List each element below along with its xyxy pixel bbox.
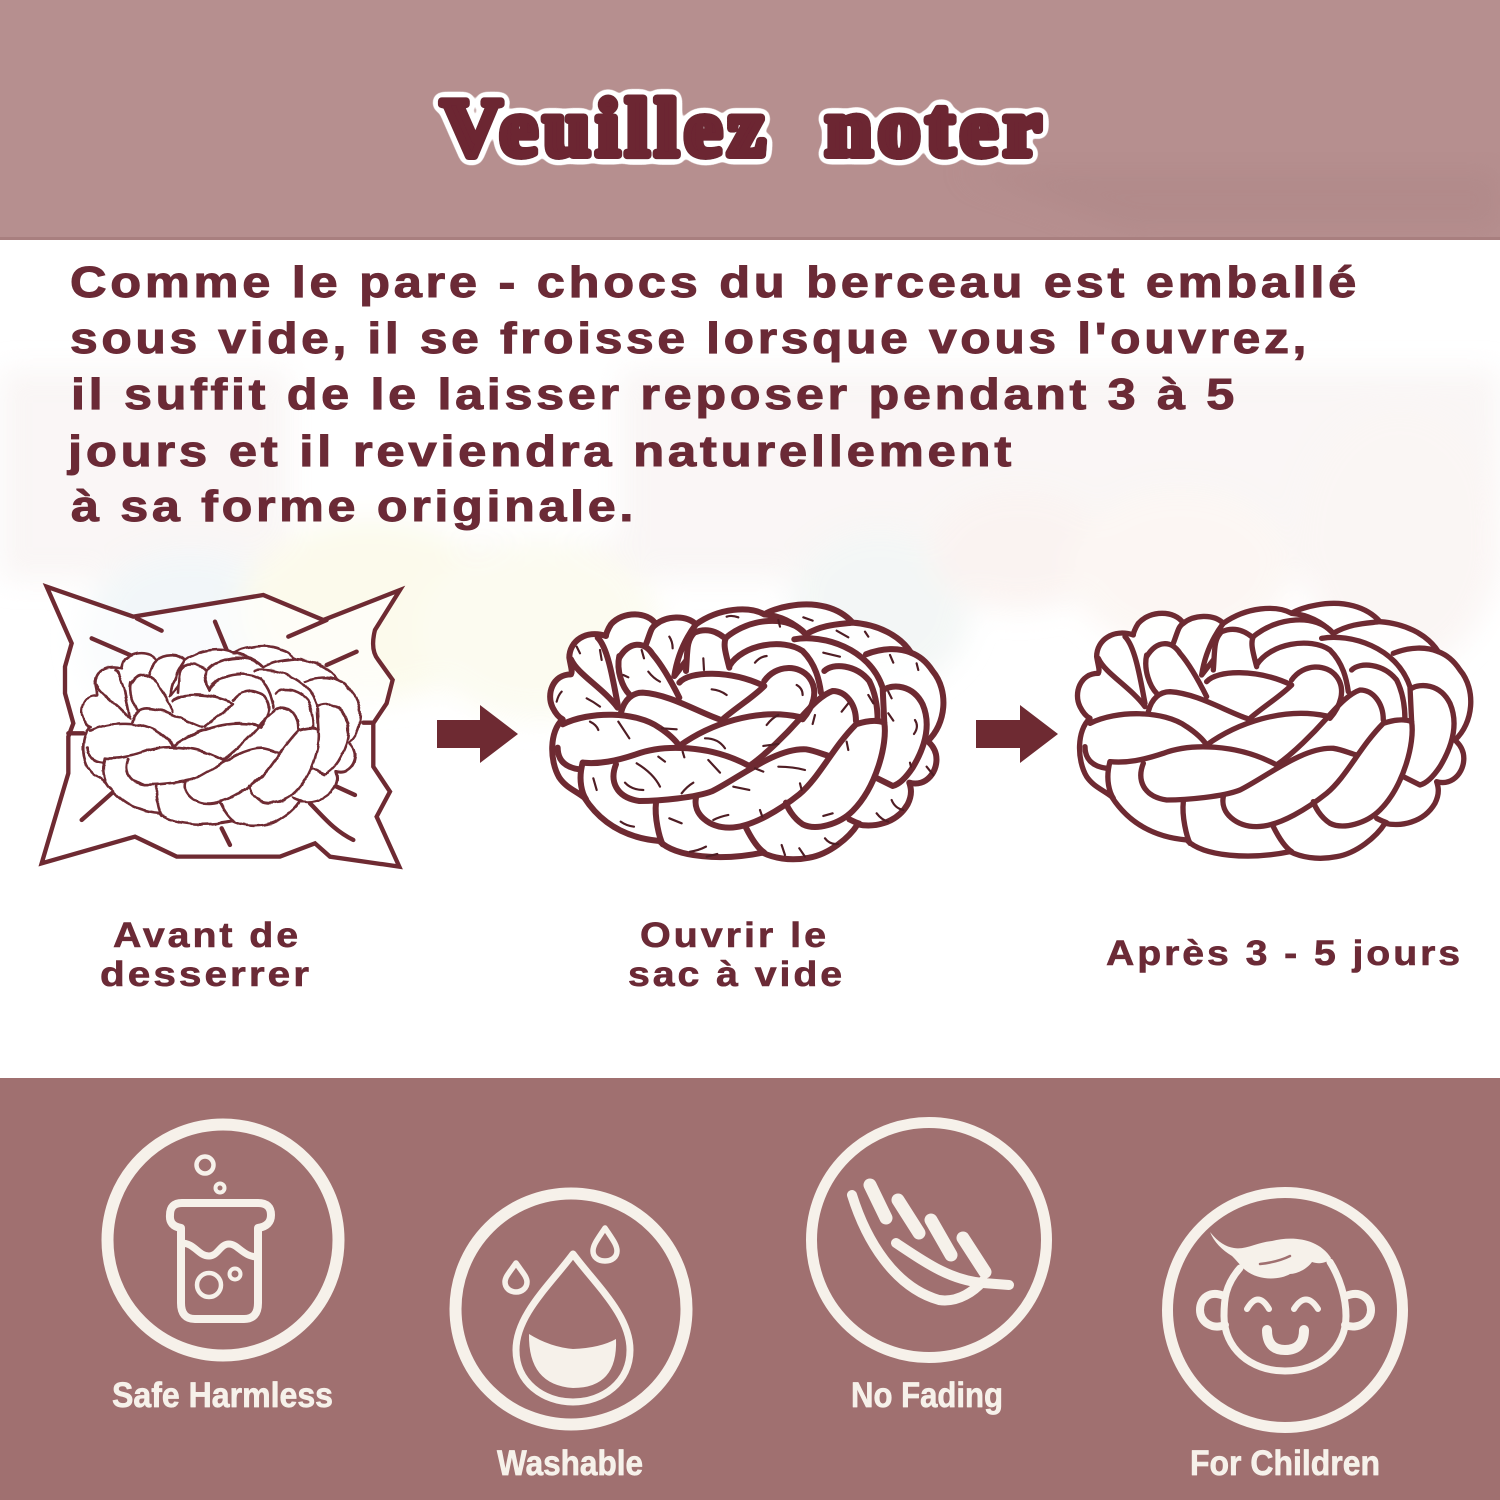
text block: explanation: Comme le pare - chocs du berceau est emballé — [70, 258, 1360, 307]
icon: water drops — [505, 1228, 630, 1402]
label: open the vacuum bag: Ouvrir le — [640, 916, 829, 955]
text block: explanation: sous vide, il se froisse lorsque vous l'ouvrez, — [70, 314, 1310, 363]
illustration: vacuum bag with compressed braid — [42, 587, 400, 867]
illustration: restored braid — [1077, 603, 1471, 858]
label: For Children — [1190, 1444, 1380, 1483]
icon: baby face — [1200, 1232, 1371, 1371]
text block: explanation — [67, 258, 1360, 531]
bag outline — [42, 587, 400, 867]
icon: feather — [852, 1185, 1009, 1300]
label: open the vacuum bag — [628, 916, 845, 994]
label: before loosening — [100, 916, 312, 994]
label: No Fading — [851, 1376, 1003, 1415]
label: Safe Harmless — [112, 1376, 333, 1415]
label: Washable — [497, 1444, 643, 1483]
text block: explanation: il suffit de le laisser reposer pendant 3 à 5 — [71, 370, 1238, 419]
label: open the vacuum bag: sac à vide — [628, 955, 845, 994]
text block: explanation: jours et il reviendra naturellement — [67, 427, 1015, 476]
arrow: first step — [437, 705, 518, 763]
text block: explanation: à sa forme originale. — [71, 482, 637, 531]
icon: drop ring — [456, 1194, 686, 1424]
panel: features band — [0, 1078, 1500, 1500]
title: Veuillez noter — [441, 82, 1047, 173]
icon: beaker — [170, 1156, 271, 1319]
label: before loosening: Avant de — [113, 916, 301, 955]
feature: safe harmless — [108, 1124, 338, 1415]
wrinkled braid — [82, 646, 360, 826]
label: before loosening: desserrer — [100, 955, 312, 994]
label: after 3 to 5 days: Après 3 - 5 jours — [1106, 934, 1463, 973]
feature: for children — [1168, 1192, 1402, 1483]
panel: header band — [0, 0, 1500, 240]
icon: baby ring — [1168, 1192, 1402, 1428]
illustration: opened braid with creases — [550, 604, 943, 859]
feature: washable — [456, 1194, 686, 1483]
icon: beaker ring — [108, 1124, 338, 1356]
feature: no fading — [812, 1122, 1046, 1415]
arrow: second step — [976, 705, 1058, 763]
icon: feather ring — [812, 1122, 1046, 1358]
crease marks — [557, 616, 933, 857]
